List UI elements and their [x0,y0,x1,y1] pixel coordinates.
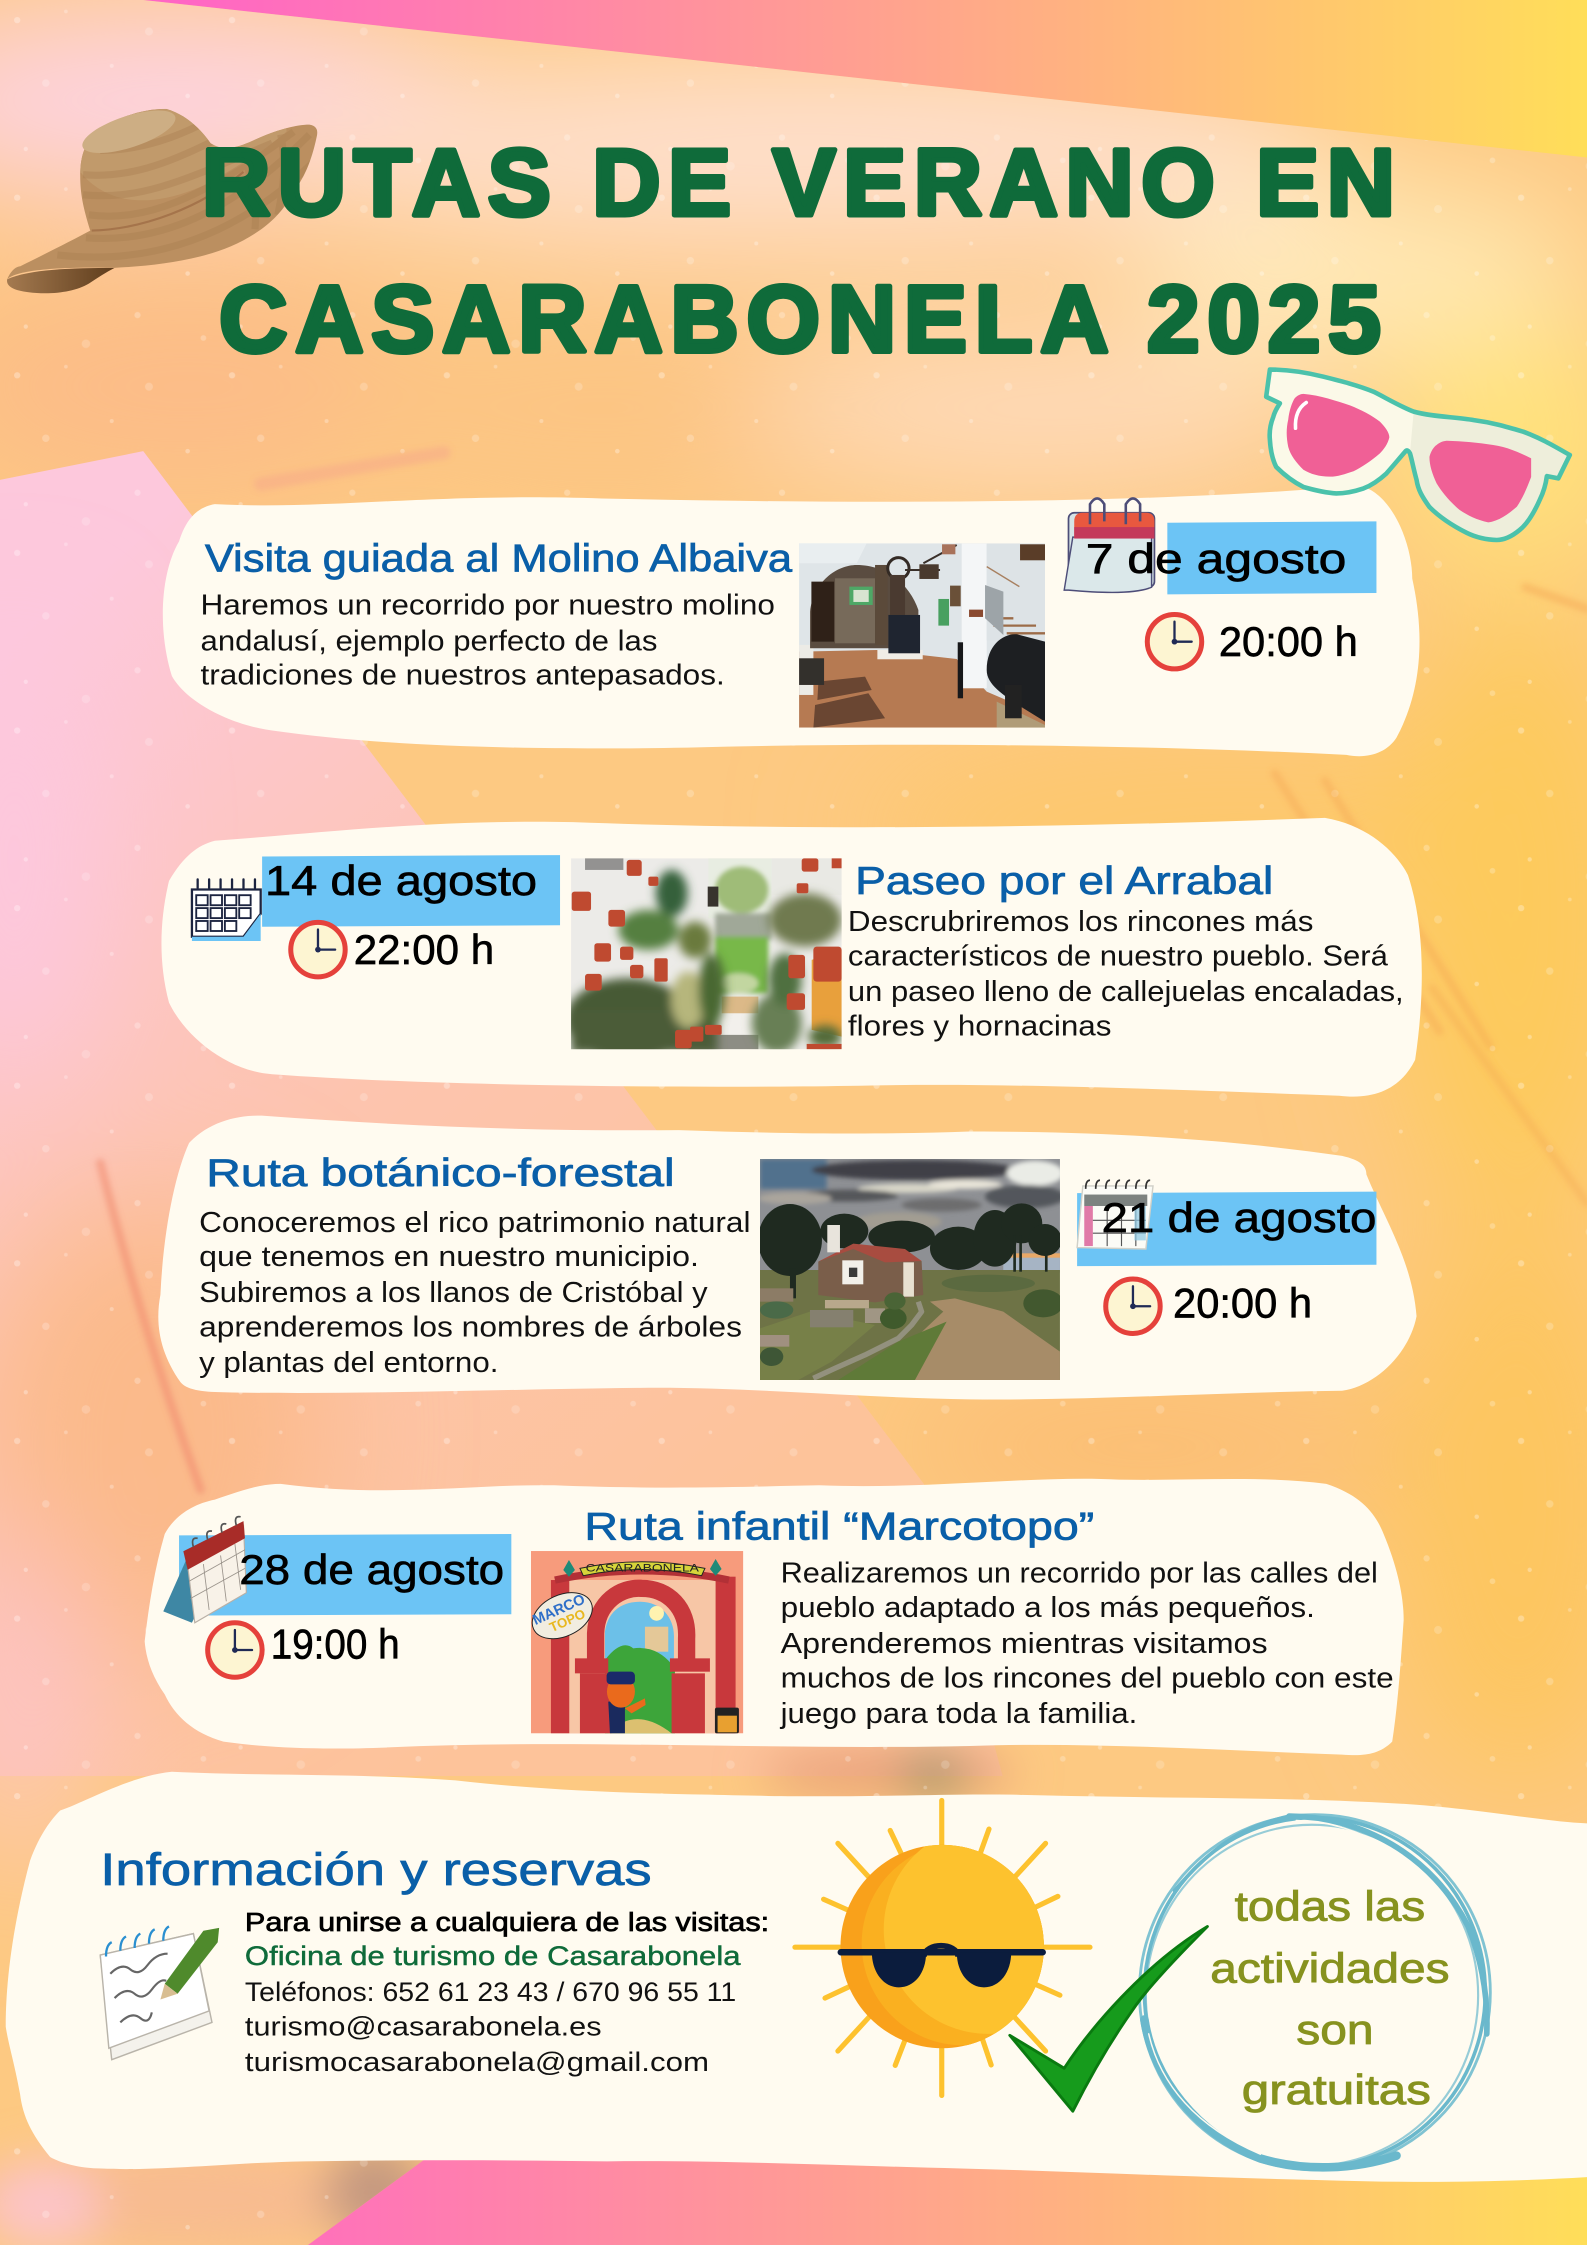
text block: aprenderemos los nombres de árboles [199,1311,742,1343]
panel: Molino Albaiva [163,486,1420,756]
time: 22:00 h [354,926,494,973]
date band [262,855,560,927]
text block: Subiremos a los llanos de Cristóbal y [199,1277,708,1309]
time: 20:00 h [1173,1280,1312,1327]
contact text: Teléfonos: 652 61 23 43 / 670 96 55 11 [245,1977,736,2007]
callout: free activities: son [1296,2006,1374,2053]
text block: flores y hornacinas [848,1011,1111,1043]
text block [199,1207,751,1379]
contact text: Para unirse a cualquiera de las visitas: [245,1909,769,1937]
contact text: turismo@casarabonela.es [245,2011,602,2041]
photo: molino interior [799,543,1045,728]
illustration: Marcotopo game poster: MARCO [531,1592,588,1629]
photo: stone hut and path [758,1159,1065,1380]
icon: clock [208,1623,262,1677]
date: 28 de agosto [239,1546,504,1593]
text block: Conoceremos el rico patrimonio natural [199,1207,751,1239]
contact text: Oficina de turismo de Casarabonela [245,1941,741,1971]
icon: green check mark [1010,1926,1207,2111]
time: 19:00 h [271,1621,400,1668]
icon: calendar [1064,498,1154,592]
contact text [245,1909,769,2077]
illustration: Marcotopo game poster: CASARABONELA [586,1563,699,1575]
panel: Información y reservas [6,1772,1587,2182]
text block [201,589,775,692]
illustration: Marcotopo game poster: TOPO [547,1606,588,1635]
left pale pink wedge [0,451,1003,1776]
date band [1167,521,1376,594]
text block: muchos de los rincones del pueblo con este [781,1662,1394,1694]
date band [1077,1192,1376,1266]
text block: tradiciones de nuestros antepasados. [201,660,725,692]
icon: calendar [163,1517,246,1623]
title: CASARABONELA 2025 [219,267,1381,373]
text block: juego para toda la familia. [780,1698,1137,1730]
date: 21 de agosto [1101,1194,1376,1241]
contact text: turismocasarabonela@gmail.com [245,2047,709,2077]
text block: un paseo lleno de callejuelas encaladas, [848,976,1404,1008]
heading: Visita guiada al Molino Albaiva [205,537,793,580]
icon: calendar [1077,1180,1153,1249]
panel: Ruta infantil Marcotopo [145,1479,1404,1755]
text block: andalusí, ejemplo perfecto de las [201,625,657,657]
text block: que tenemos en nuestro municipio. [199,1241,699,1273]
text block [780,1558,1394,1730]
text block: Haremos un recorrido por nuestro molino [201,589,775,621]
text block: característicos de nuestro pueblo. Será [848,940,1388,972]
text block: y plantas del entorno. [199,1347,498,1379]
callout: free activities: todas las [1235,1883,1425,1930]
icon: sunglasses [1266,370,1570,540]
icon: straw hat [0,100,329,293]
panel: Paseo por el Arrabal [161,818,1422,1097]
callout: free activities: actividades [1210,1944,1449,1991]
panel: Ruta botánico-forestal [158,1116,1417,1400]
icon: hand-drawn circle [1139,1815,1490,2170]
date band [179,1534,511,1616]
icon: calendar [192,879,261,941]
illustration: Marcotopo game poster [525,1551,743,1733]
callout: free activities: gratuitas [1242,2066,1431,2113]
icon: clock [1147,614,1202,669]
callout: free activities [1210,1883,1449,2113]
icon: clock [1106,1279,1160,1333]
text block: Aprenderemos mientras visitamos [781,1628,1268,1660]
text block: Descrubriremos los rincones más [848,906,1313,938]
text block [848,906,1404,1043]
text block: Realizaremos un recorrido por las calles del [781,1558,1378,1590]
heading: Información y reservas [100,1844,652,1895]
date: 7 de agosto [1086,535,1346,582]
text block: pueblo adaptado a los más pequeños. [781,1592,1315,1624]
title: RUTAS DE VERANO EN [202,130,1395,236]
icon: notepad and pencil [100,1926,219,2060]
heading: Ruta botánico-forestal [206,1152,675,1195]
heading: Ruta infantil “Marcotopo” [584,1506,1094,1549]
date: 14 de agosto [265,857,537,904]
icon: clock [291,922,345,977]
photo: flower street [565,858,842,1062]
time: 20:00 h [1219,618,1358,665]
icon: sun with sunglasses [795,1800,1093,2095]
heading: Paseo por el Arrabal [855,860,1273,903]
title [202,130,1395,373]
